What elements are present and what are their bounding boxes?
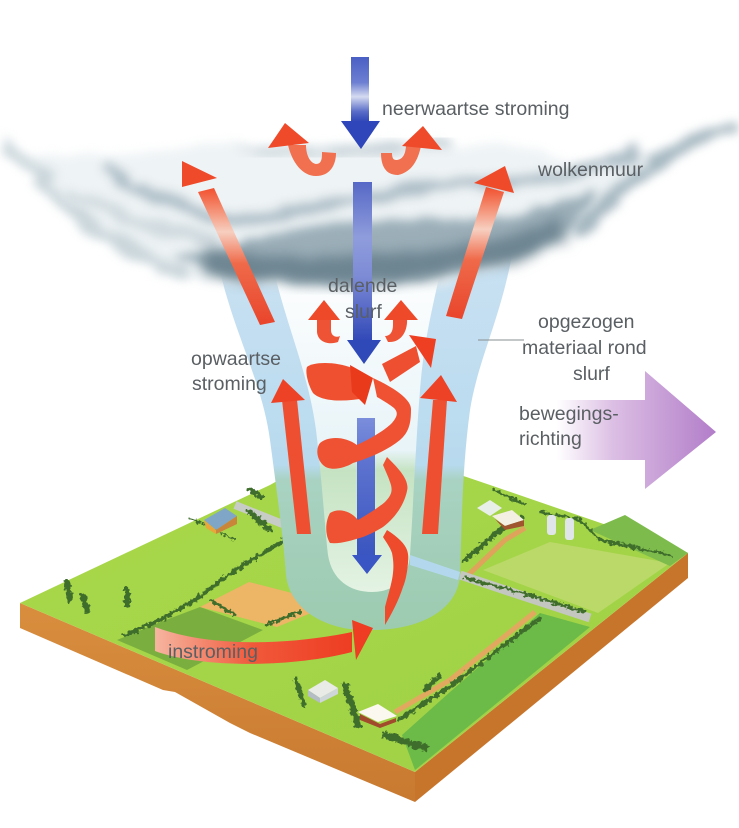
ribbon: middle sweep [326, 457, 407, 543]
label: wolkenmuur: wolkenmuur [537, 159, 644, 181]
green field right back [483, 542, 670, 613]
arrow: diagonal from spiral [382, 335, 436, 382]
grey road [460, 575, 590, 618]
leader line: opgezogen materiaal [478, 339, 524, 341]
label: opgezogen materiaal rond slurf: slurf [573, 363, 610, 385]
label: bewegingsrichting [519, 403, 619, 450]
ground block [20, 468, 688, 802]
farm lane back right [465, 528, 525, 578]
label: opwaartse stroming: opwaartse [191, 348, 281, 370]
label: bewegingsrichting: richting [519, 428, 582, 450]
arrow: small left rising [308, 300, 340, 343]
label: bewegingsrichting: bewegings- [519, 403, 619, 425]
farm front grey building [308, 680, 338, 703]
arrow: left straight up [271, 379, 311, 534]
cloud wall [0, 126, 739, 288]
cloud: left wisp edge [3, 142, 190, 272]
right soil side [415, 553, 688, 802]
ribbon: top loop with arrow head [306, 363, 365, 401]
farm lane [395, 612, 535, 712]
dark field right corner [590, 515, 688, 566]
funnel: inner core [272, 255, 444, 592]
label: opwaartse stroming: stroming [192, 373, 267, 395]
cloud: dark underside [205, 228, 562, 269]
farm front red building [358, 704, 397, 728]
cloud: top wisp [240, 142, 450, 153]
crossing water strip [410, 555, 460, 580]
label: opgezogen materiaal rond slurf: opgezogen [538, 311, 635, 333]
label: instroming: instroming [168, 641, 258, 663]
label: opwaartse stroming [191, 348, 281, 395]
label: opgezogen materiaal rond slurf [522, 311, 647, 385]
grass top surface [20, 468, 688, 772]
spiral ribbon [306, 363, 411, 625]
barn back left [204, 508, 237, 534]
cloud: upper left band [105, 150, 640, 220]
cloud: main grey mass [170, 190, 598, 285]
arrow: instroming [155, 620, 373, 664]
label: neerwaartse stroming: neerwaartse stroming [382, 98, 570, 120]
arrow: central blue downward [352, 418, 382, 574]
farm back right [477, 500, 524, 530]
arrow: top-right curl [381, 126, 442, 175]
label: dalende slurf: slurf [345, 301, 382, 323]
funnel: debris sheath [218, 255, 512, 630]
arrow: right straight up [420, 375, 457, 534]
cloud body [0, 126, 739, 288]
left soil side [20, 603, 415, 802]
arrow: left rising from funnel to cloud [182, 161, 275, 325]
cloud: right wisp edge [575, 127, 738, 228]
hedges and trees [67, 490, 670, 748]
arrow: dalende slurf blue [347, 182, 381, 364]
darker green field front right [402, 613, 590, 770]
arrow: top-left curl [268, 123, 336, 176]
cloud: second band [70, 190, 220, 240]
arrow: small right rising [384, 300, 418, 342]
ribbon: lower tail [383, 530, 408, 625]
label: opgezogen materiaal rond slurf: materiaal rond [522, 337, 647, 359]
orange field [200, 582, 311, 627]
label: dalende slurf: dalende [328, 275, 397, 297]
grey road back [235, 505, 285, 525]
silos [547, 515, 574, 540]
arrow: neerwaartse stroming blue [341, 57, 380, 149]
label: dalende slurf [328, 275, 397, 323]
arrow: right rising from funnel to cloud [446, 166, 514, 319]
ribbon: upper sweep [317, 378, 411, 469]
arrow: bewegingsrichting purple [557, 371, 716, 489]
dark green field centre left [117, 607, 263, 670]
